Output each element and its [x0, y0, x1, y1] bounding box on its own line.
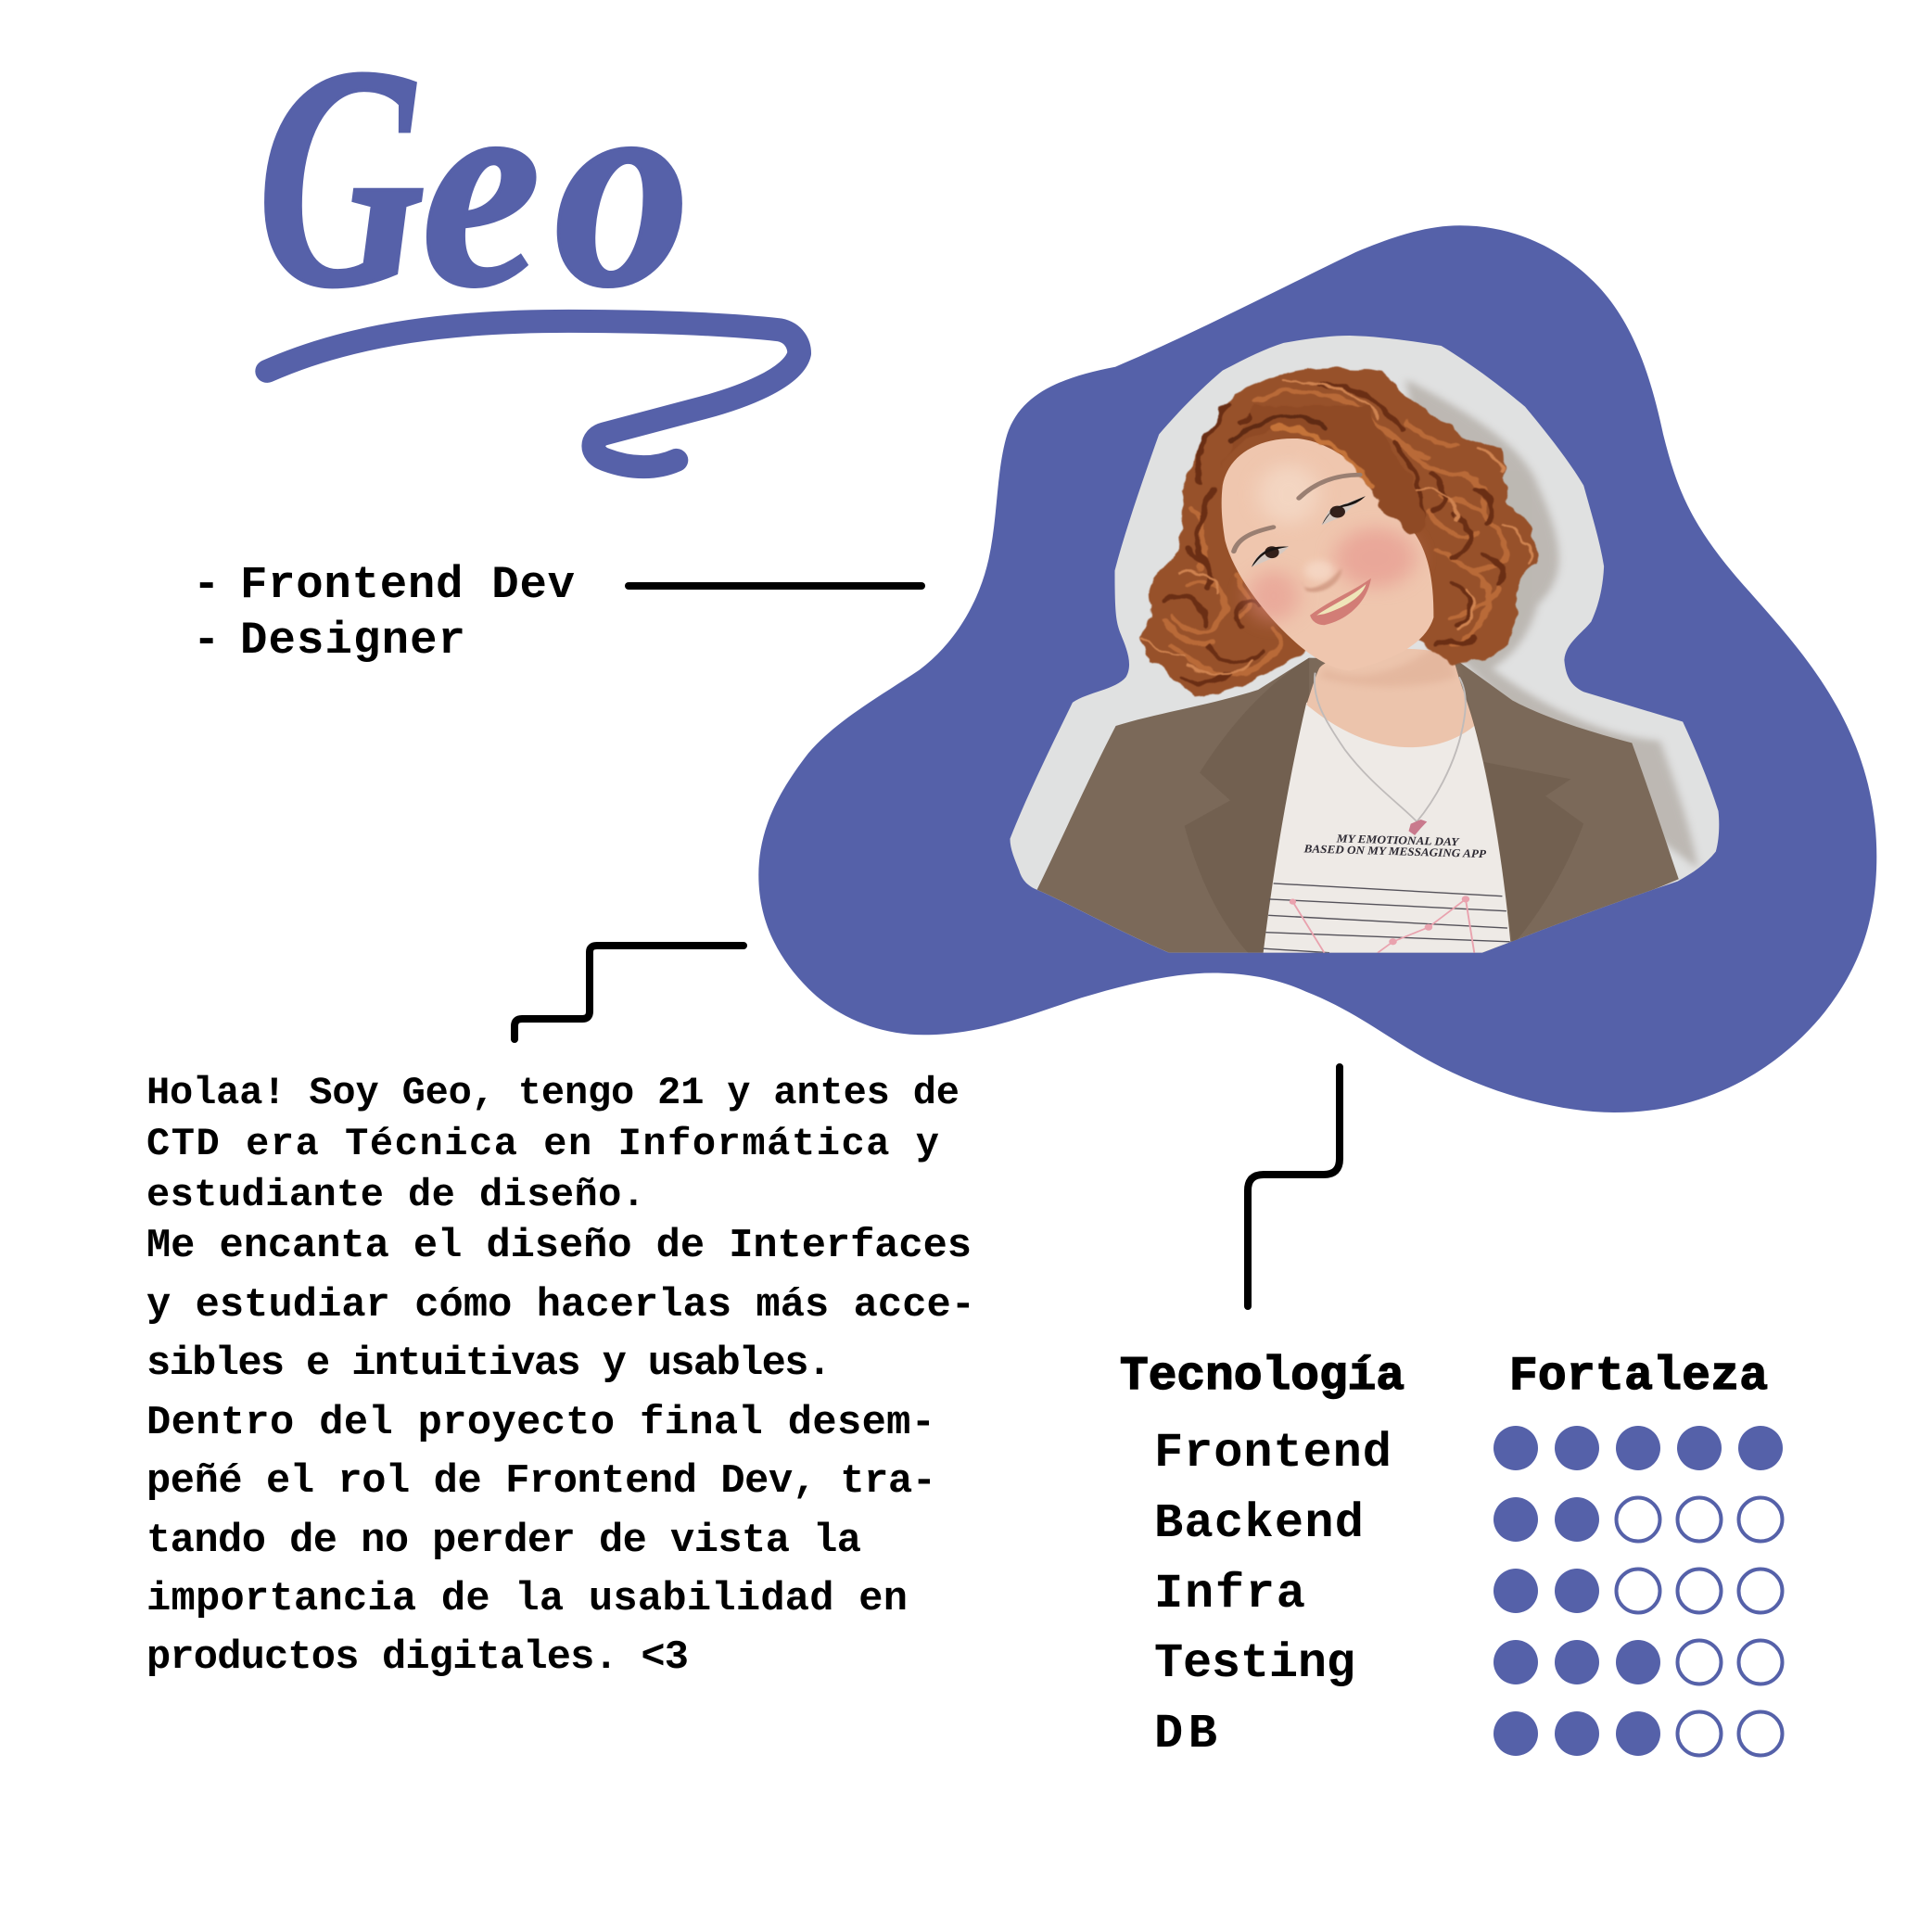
skill row: DB: DB [1154, 1707, 1217, 1761]
biography intro text [146, 1071, 960, 1217]
skill row: Backend [1154, 1496, 1782, 1551]
neck [1306, 649, 1474, 747]
connector: photo to bio [515, 946, 744, 1039]
role text [193, 559, 575, 667]
role text: Designer [240, 615, 465, 667]
role text: - [193, 615, 220, 667]
wall shadow behind hair [1405, 379, 1698, 869]
shirt pink star [1290, 896, 1474, 953]
portrait photo [1010, 336, 1719, 953]
title: Geo: G [258, 1, 425, 352]
title: Geo: o [554, 29, 690, 347]
biography body text: Me encanta el diseño de Interfaces [146, 1224, 972, 1269]
hair mass [1139, 368, 1537, 697]
right eyebrow [1299, 475, 1360, 498]
title: Geo [258, 1, 690, 352]
shirt slogan [1303, 834, 1487, 858]
left cheek blush [1248, 570, 1299, 622]
skill row: Infra [1154, 1567, 1782, 1621]
biography body text: peñé el rol de Frontend Dev, tra- [146, 1459, 936, 1505]
decorative underline swoosh [267, 321, 799, 467]
biography body text [146, 1224, 975, 1681]
necklace [1315, 673, 1466, 821]
blob background [758, 225, 1876, 1112]
forehead highlight [1258, 464, 1319, 524]
biography body text: y estudiar cómo hacerlas más acce- [146, 1283, 975, 1328]
biography body text: sibles e intuitivas y usables. [146, 1341, 832, 1387]
right eye [1321, 496, 1366, 526]
face [1222, 439, 1433, 670]
necklace pendant [1409, 820, 1427, 835]
left eye [1252, 546, 1289, 567]
biography intro text: CTD era Técnica en Informática y [146, 1122, 939, 1166]
biography intro text: estudiante de diseño. [146, 1173, 645, 1217]
skill row: Frontend: Frontend [1154, 1426, 1392, 1481]
table heading: Tecnología: Tecnología [1120, 1351, 1405, 1404]
biography body text: Dentro del proyecto final desem- [146, 1401, 935, 1446]
skill row: Testing [1154, 1636, 1782, 1691]
shirt slogan: BASED ON MY MESSAGING APP [1303, 842, 1487, 860]
shirt [1264, 703, 1511, 953]
shirt stripes [1264, 883, 1510, 953]
neck shadow [1324, 649, 1457, 686]
mouth [1310, 578, 1371, 625]
skill row: Frontend [1154, 1426, 1783, 1481]
cheek blush [1334, 528, 1416, 588]
wall background [1010, 336, 1719, 953]
table heading: Fortaleza: Fortaleza [1509, 1351, 1768, 1404]
shirt slogan: MY EMOTIONAL DAY [1336, 832, 1460, 848]
nose [1301, 560, 1341, 592]
fringe [1221, 405, 1423, 535]
biography body text: tando de no perder de vista la [146, 1519, 861, 1564]
jacket lapel shading [1185, 658, 1583, 953]
biography body text: importancia de la usabilidad en [146, 1577, 908, 1622]
skill row: Infra: Infra [1154, 1567, 1305, 1621]
skill row: DB [1154, 1707, 1782, 1761]
connector: photo to skills table [1248, 1067, 1340, 1306]
biography intro text: Holaa! Soy Geo, tengo 21 y antes de [146, 1071, 960, 1115]
title: Geo: e [422, 29, 540, 347]
role text: - [193, 559, 220, 611]
skill row: Testing: Testing [1154, 1636, 1355, 1691]
left eyebrow [1234, 527, 1274, 552]
role text: Frontend Dev [240, 559, 575, 611]
jacket [1037, 658, 1679, 953]
connector: role to photo [629, 582, 922, 590]
teeth [1316, 584, 1366, 616]
skill row: Backend: Backend [1154, 1496, 1364, 1551]
biography body text: productos digitales. <3 [146, 1635, 689, 1681]
